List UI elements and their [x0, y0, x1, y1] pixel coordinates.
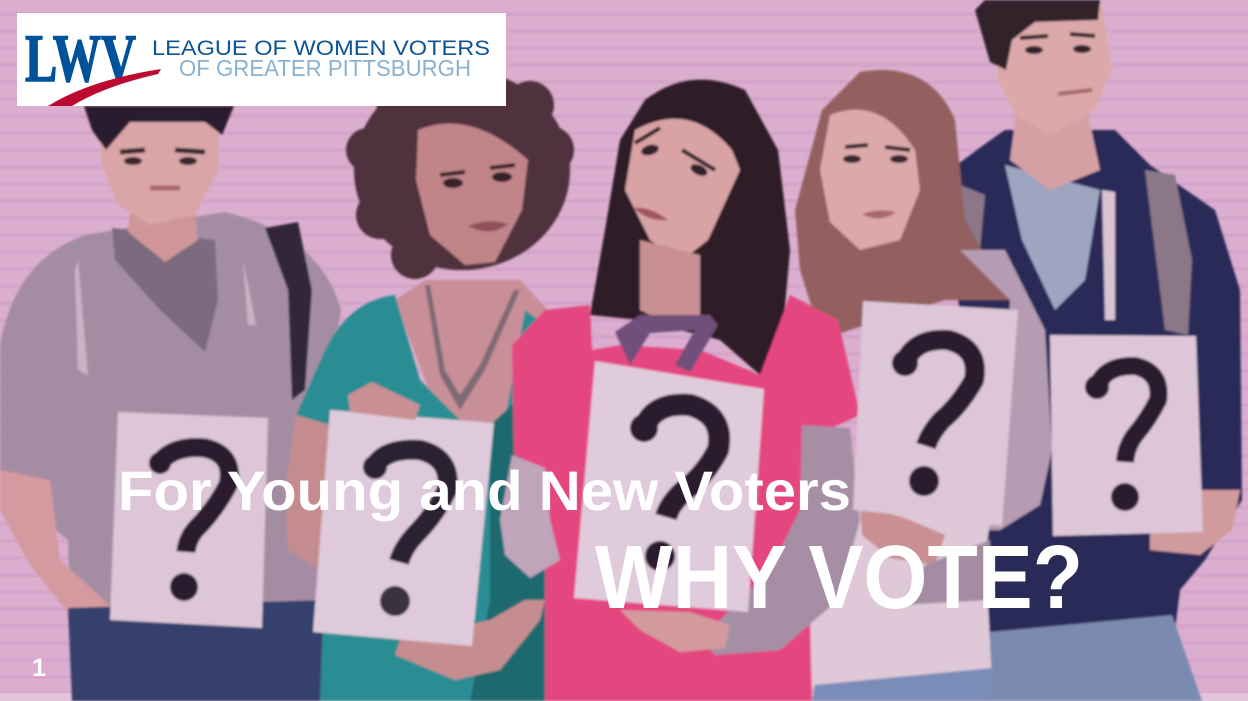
- logo panel: [17, 13, 506, 106]
- sign: question mark 3: [574, 361, 764, 612]
- logo mark: red swoosh: [48, 69, 161, 106]
- logo mark: LWV letters: LWV: [25, 20, 136, 96]
- hands on signs: [348, 382, 420, 420]
- face details: [120, 150, 205, 152]
- person: woman with curly hair in teal top: [285, 70, 574, 701]
- subtitle: For Young and New Voters: [118, 459, 851, 522]
- person: woman in pink t-shirt centre: [500, 80, 860, 701]
- teal top hands and forearm: [395, 600, 545, 680]
- sign: question mark 1: [110, 412, 268, 628]
- logo name line 1: LEAGUE OF WOMEN VOTERS: [152, 37, 490, 60]
- sign: question mark 5: [1050, 335, 1203, 536]
- slide number: 1: [32, 654, 46, 682]
- person: man in grey hoodie: [0, 106, 341, 701]
- main title: WHY VOTE?: [595, 528, 1083, 628]
- person: man in navy hoodie: [948, 0, 1242, 701]
- sign: question mark 4: [853, 301, 1018, 526]
- person: woman with long auburn hair in grey top: [795, 70, 1052, 701]
- sign: question mark 2: [313, 410, 494, 646]
- logo name line 2: OF GREATER PITTSBURGH: [179, 55, 471, 81]
